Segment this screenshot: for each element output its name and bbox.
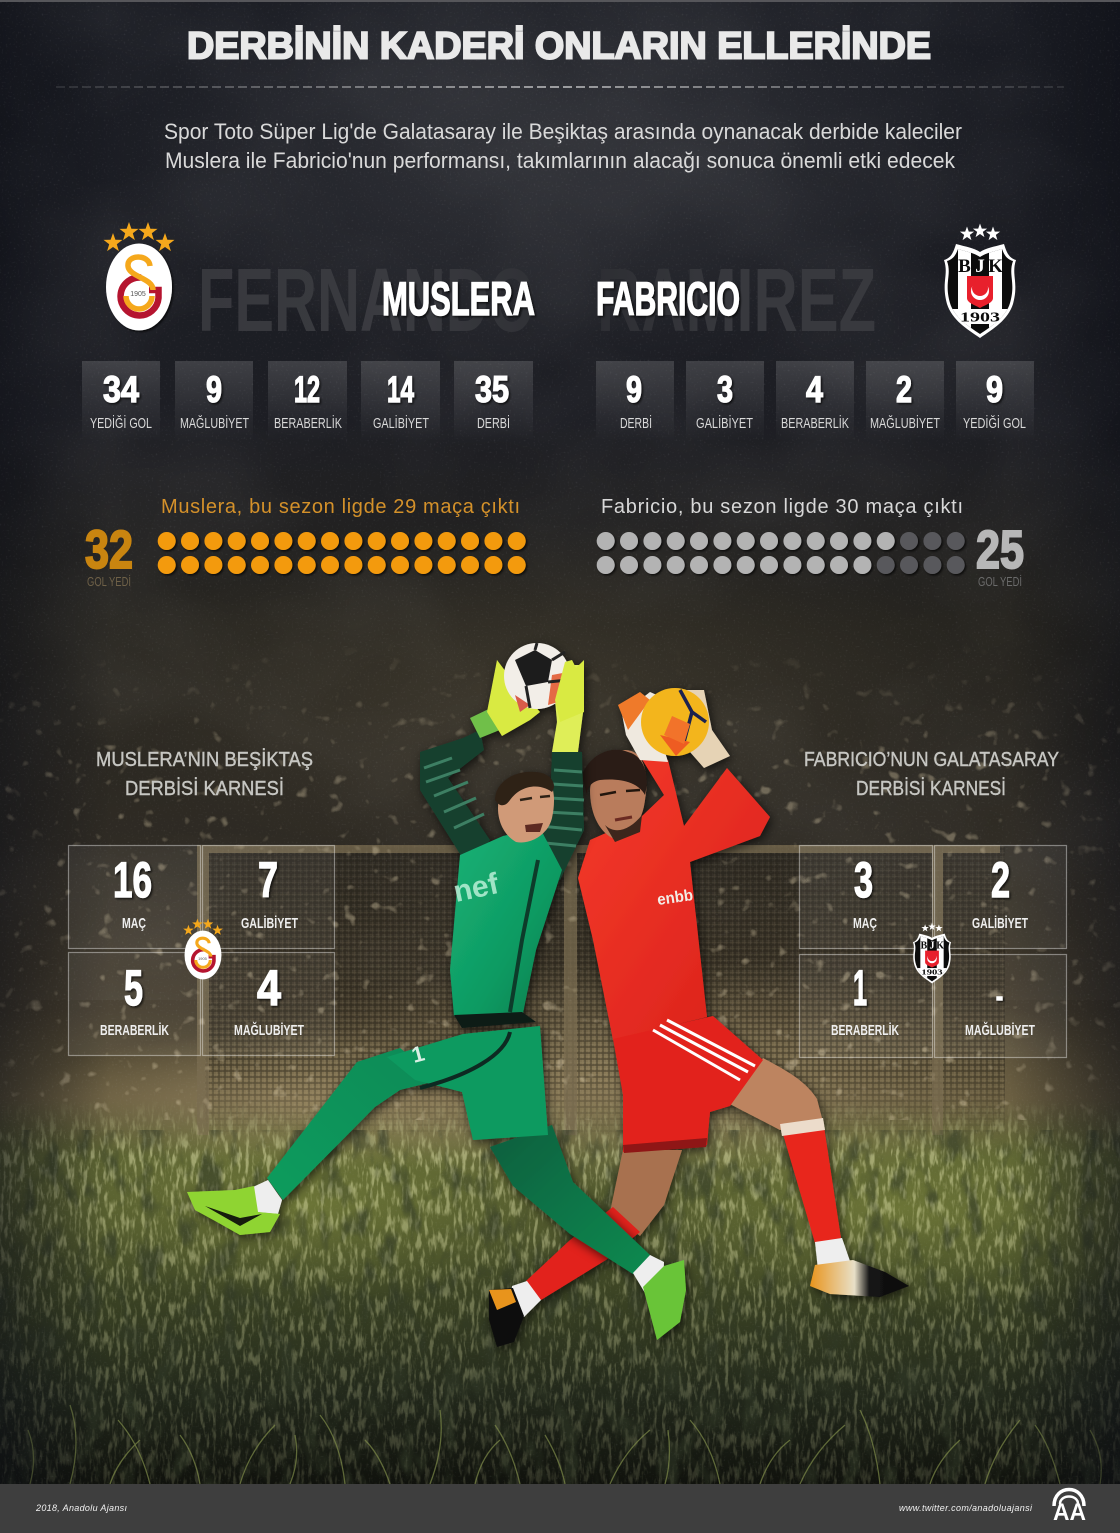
season text: Fabricio: Fabricio, bu sezon ligde 30 maça çıktı (601, 496, 963, 518)
stat boxes: Muslera: 35 (475, 369, 509, 410)
player name: Fabricio (596, 251, 876, 351)
icon: small Besiktas crest: B (920, 940, 927, 951)
ball: yellow (641, 688, 709, 756)
stat boxes: Fabricio: 4 (806, 369, 823, 410)
footer bar: www.twitter.com/anadoluajansi (899, 1503, 1033, 1513)
scorecard: Fabricio: BERABERLİK (831, 1022, 899, 1039)
icon: Besiktas crest (944, 224, 1016, 338)
stat boxes: Fabricio: 9 (626, 369, 642, 410)
icon: small Besiktas crest: 1903 (921, 968, 943, 977)
scorecard: Muslera (68, 846, 334, 1056)
goals conceded: Muslera 32: GOL YEDİ (87, 574, 131, 589)
season text: Muslera: Muslera, bu sezon ligde 29 maça çıktı (161, 496, 520, 518)
scorecard: Muslera: MAÇ (122, 915, 146, 932)
dot chart: Muslera (158, 532, 526, 574)
heading: Muslera derby record: MUSLERA’NIN BEŞİKTAŞ (96, 748, 313, 771)
stat boxes: Muslera: GALİBİYET (373, 414, 429, 432)
copyright: 2018, Anadolu Ajansı (35, 1503, 127, 1513)
stat boxes: Fabricio: 3 (717, 369, 733, 410)
icon: small Galatasaray crest: 1905 (198, 956, 208, 961)
intro text: Spor Toto Süper Lig'de Galatasaray ile Beşiktaş arasında oynanacak derbide kaleciler (164, 119, 962, 144)
scorecard: Muslera: MAĞLUBİYET (234, 1021, 304, 1039)
heading: Fabricio derby record: FABRICIO’NUN GALATASARAY (804, 749, 1059, 771)
scorecard: Fabricio: 2 (991, 852, 1010, 908)
scorecard: Fabricio: MAĞLUBİYET (965, 1021, 1035, 1039)
sponsor text: enbb (656, 887, 694, 909)
icon: Besiktas crest: 1903 (960, 310, 1000, 326)
goals conceded: Muslera 32: 32 (85, 520, 133, 580)
shorts (613, 1016, 763, 1153)
icon: small Galatasaray crest (183, 919, 223, 979)
intro text: Muslera ile Fabricio'nun performansı, takımlarının alacağı sonuca önemli etki edecek (165, 148, 956, 173)
heading: Fabricio derby record: DERBİSİ KARNESİ (856, 777, 1006, 800)
raised arms (420, 730, 584, 880)
player name: Muslera: FERNANDO (198, 251, 535, 351)
heading: Muslera derby record (96, 748, 313, 800)
head and hair (495, 772, 554, 843)
sponsor text: nef (451, 867, 502, 909)
extended leg (187, 1048, 440, 1235)
goals conceded: Fabricio 25: GOL YEDİ (978, 574, 1022, 589)
dashed divider (56, 86, 1064, 88)
scorecard: Fabricio: MAÇ (853, 915, 877, 932)
dot chart: Fabricio (597, 532, 965, 574)
goals conceded: Fabricio 25: 25 (976, 520, 1024, 580)
stat boxes: Fabricio (596, 361, 1034, 441)
gloves (618, 690, 730, 768)
ball: white (504, 643, 570, 712)
torso (450, 828, 562, 1018)
heading: Muslera derby record: DERBİSİ KARNESİ (125, 777, 284, 800)
scorecard: Muslera: 7 (258, 852, 278, 908)
shorts: 1 (409, 1041, 427, 1068)
stat boxes: Muslera: BERABERLİK (274, 414, 342, 432)
stat boxes: Muslera: DERBİ (477, 414, 510, 432)
head and hair (582, 750, 647, 842)
scorecard: Fabricio: 3 (854, 852, 873, 908)
trailing leg (490, 1125, 686, 1340)
player name: Muslera (198, 251, 535, 351)
stat boxes: Fabricio: MAĞLUBİYET (870, 414, 940, 432)
stat boxes: Muslera: YEDİĞİ GOL (90, 414, 152, 432)
scorecard: Muslera: 4 (257, 960, 281, 1016)
intro text (164, 119, 962, 173)
stat boxes: Fabricio: 2 (896, 369, 912, 410)
player name: Fabricio: RAMIREZ (597, 251, 876, 351)
stat boxes: Fabricio: YEDİĞİ GOL (963, 414, 1026, 432)
player name: Fabricio: FABRICIO (596, 272, 740, 325)
icon: Besiktas crest: K (988, 256, 1003, 277)
icon: Besiktas crest: B (958, 256, 971, 277)
stat boxes: Muslera (82, 361, 533, 441)
stat boxes: Muslera: 34 (103, 369, 139, 410)
shorts (387, 1026, 548, 1140)
front leg (730, 1058, 909, 1297)
goal frame (197, 845, 1000, 1135)
icon: Galatasaray crest: 1905 (130, 291, 146, 298)
icon: small Besiktas crest: J (929, 940, 935, 951)
stat boxes: Fabricio: DERBİ (620, 414, 652, 432)
scorecard: Fabricio: 1 (853, 960, 867, 1016)
scorecard: Muslera: 5 (124, 960, 143, 1016)
icon: Galatasaray crest (104, 222, 174, 330)
scorecard: Muslera: 16 (113, 852, 152, 908)
wrist tape and gloves (470, 660, 584, 752)
heading: Fabricio derby record (804, 749, 1059, 800)
scorecard: Muslera: GALİBİYET (241, 915, 298, 932)
icon: Anadolu Agency logo: AA (1053, 1499, 1086, 1526)
stat boxes: Muslera: 14 (387, 369, 414, 410)
title: DERBİNİN KADERİ ONLARIN ELLERİNDE (187, 26, 931, 68)
back leg (489, 1150, 682, 1347)
scorecard: Fabricio (800, 846, 1066, 1058)
stat boxes: Muslera: 12 (294, 369, 320, 410)
player illustration: Fabricio in red (489, 688, 909, 1347)
player name: Muslera: MUSLERA (382, 272, 535, 325)
scorecard: Fabricio: - (996, 981, 1003, 1011)
player illustration: Muslera in green (187, 643, 686, 1340)
stat boxes: Fabricio: GALİBİYET (696, 414, 753, 432)
footer bar (0, 1484, 1120, 1533)
icon: small Besiktas crest (913, 923, 951, 984)
scorecard: Fabricio: GALİBİYET (972, 915, 1028, 932)
stat boxes: Fabricio: 9 (986, 369, 1003, 410)
stat boxes: Muslera: 9 (206, 369, 222, 410)
stat boxes: Muslera: MAĞLUBİYET (180, 414, 249, 432)
hand over ball (555, 660, 584, 722)
belt (454, 1012, 536, 1028)
stat boxes: Fabricio: BERABERLİK (781, 414, 849, 432)
torso and arms (578, 756, 770, 1040)
icon: Besiktas crest: J (975, 256, 985, 277)
scorecard: Muslera: BERABERLİK (100, 1022, 169, 1039)
icon: small Besiktas crest: K (936, 940, 944, 951)
